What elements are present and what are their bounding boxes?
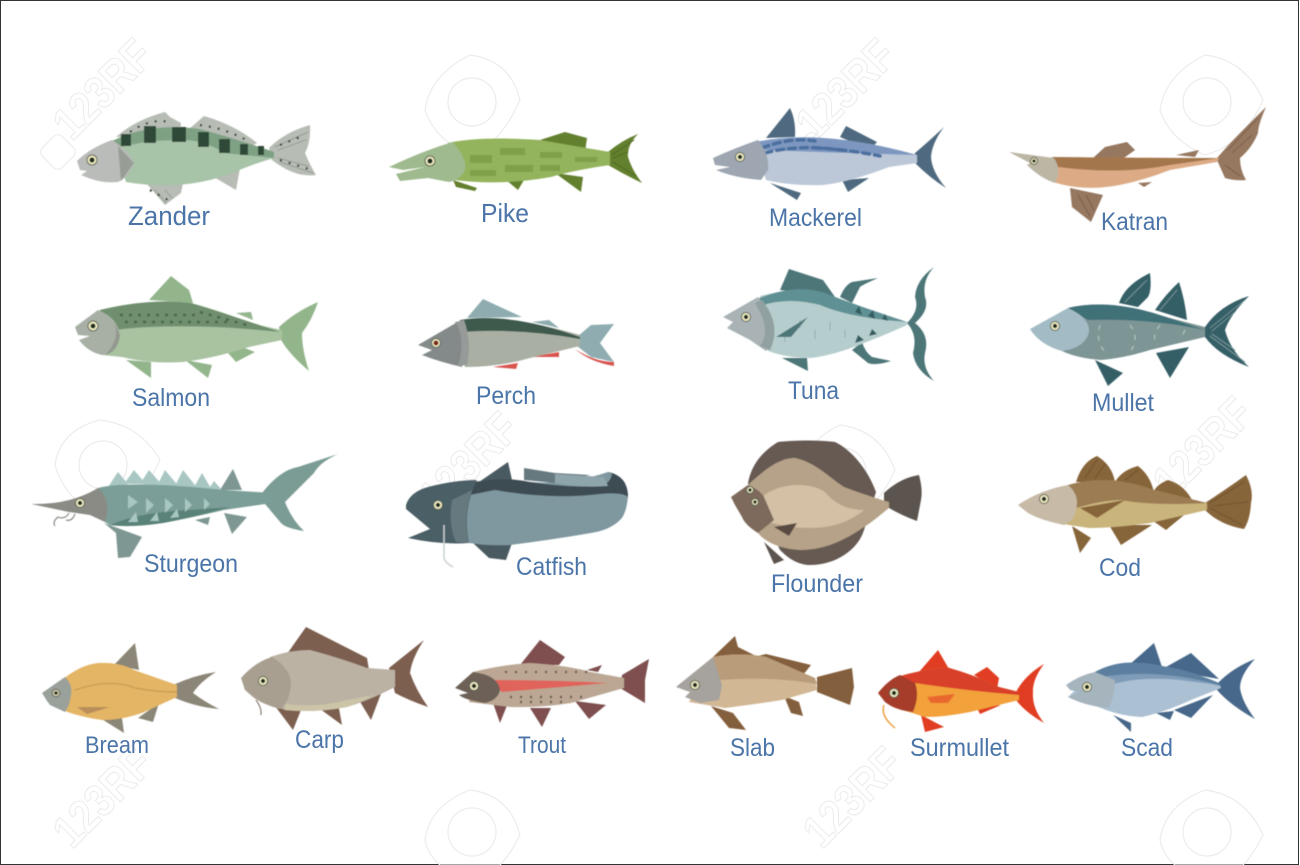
fish: trout bbox=[455, 640, 649, 727]
fish: tuna bbox=[723, 267, 934, 381]
fish: katran bbox=[1009, 107, 1266, 222]
label: Trout: Trout bbox=[518, 732, 566, 759]
fish: pike bbox=[389, 132, 642, 192]
infographic canvas: 123RF bbox=[792, 737, 913, 857]
label: Bream: Bream bbox=[85, 732, 149, 759]
fish: flounder bbox=[731, 440, 922, 565]
label: Perch: Perch bbox=[476, 382, 536, 410]
fish: salmon bbox=[75, 276, 318, 378]
infographic canvas: 123RF bbox=[1142, 387, 1263, 507]
label: Catfish: Catfish bbox=[516, 553, 587, 581]
label: Salmon: Salmon bbox=[132, 384, 210, 412]
infographic canvas: 123RF bbox=[408, 402, 529, 522]
fish: mackerel bbox=[713, 108, 946, 200]
infographic canvas: 123RF bbox=[42, 29, 163, 149]
label: Scad: Scad bbox=[1121, 734, 1173, 762]
label: Pike: Pike bbox=[481, 198, 529, 228]
fish: zander bbox=[77, 112, 316, 205]
label: Mackerel: Mackerel bbox=[769, 204, 862, 232]
fish: sturgeon bbox=[31, 454, 338, 558]
label: Tuna: Tuna bbox=[788, 377, 839, 405]
label: Carp: Carp bbox=[295, 726, 344, 754]
infographic canvas: 123RF bbox=[785, 29, 906, 149]
fish: mullet bbox=[1030, 273, 1249, 386]
fish: carp bbox=[241, 627, 428, 730]
label: Slab: Slab bbox=[730, 734, 775, 762]
fish: cod bbox=[1018, 456, 1252, 553]
label: Flounder: Flounder bbox=[771, 570, 863, 598]
fish: slab bbox=[676, 636, 854, 730]
fish: bream bbox=[42, 643, 219, 733]
fish: perch bbox=[418, 299, 614, 369]
label: Cod: Cod bbox=[1099, 554, 1141, 582]
label: Sturgeon: Sturgeon bbox=[144, 550, 238, 578]
fish: catfish bbox=[406, 462, 628, 567]
label: Zander: Zander bbox=[128, 201, 210, 231]
fish: surmullet bbox=[878, 650, 1044, 732]
infographic canvas: 123RF bbox=[42, 737, 163, 857]
label: Katran: Katran bbox=[1101, 208, 1168, 236]
label: Mullet: Mullet bbox=[1092, 389, 1154, 417]
fish: scad bbox=[1066, 643, 1255, 732]
label: Surmullet: Surmullet bbox=[910, 734, 1009, 762]
